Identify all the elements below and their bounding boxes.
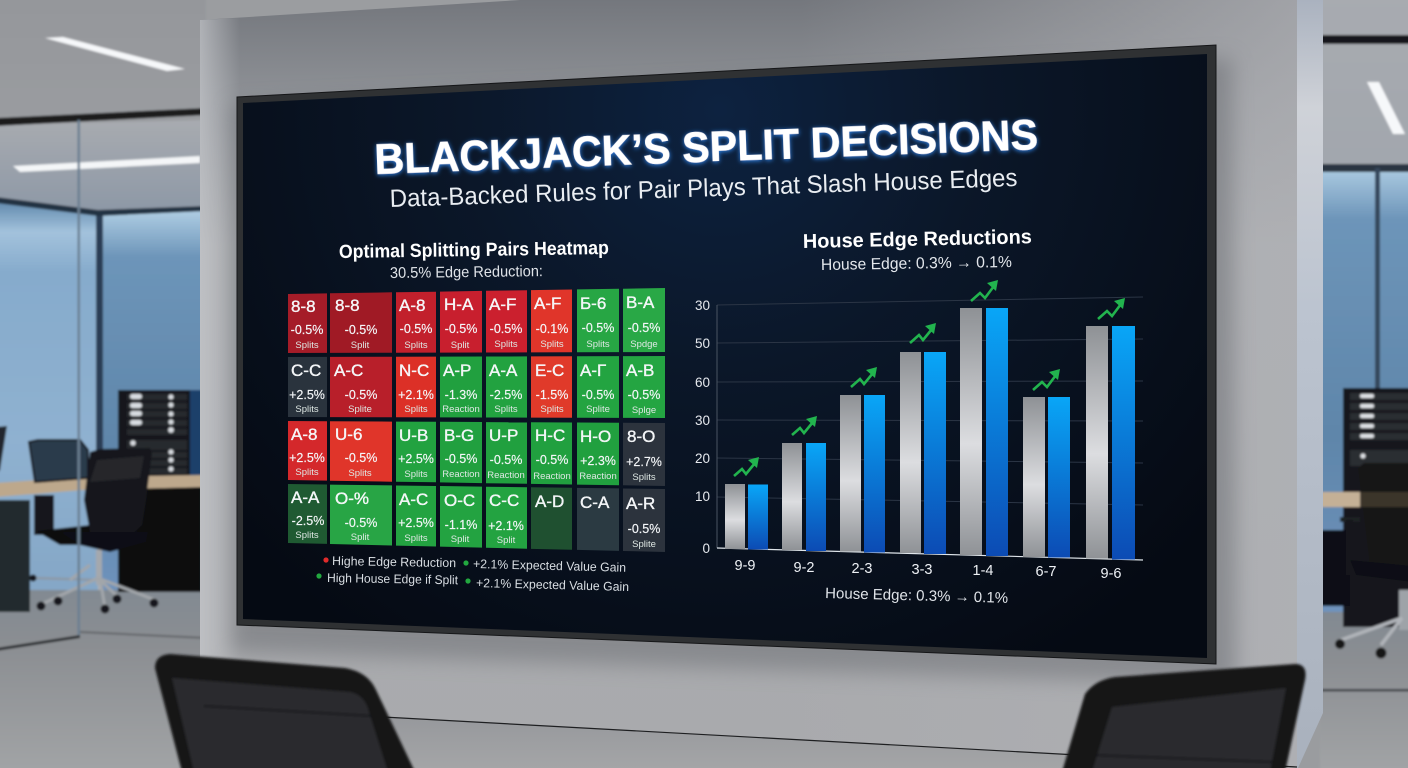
x axis labels: 9-9 xyxy=(735,558,755,574)
row 3 cell: U-P: U-P xyxy=(489,426,518,445)
row 4 cell: A-A: A-A xyxy=(291,488,320,507)
bar pair 1-4 xyxy=(960,308,1008,556)
icon: trend arrow 5 xyxy=(971,280,998,301)
row 3 cell: U-B: U-B xyxy=(399,426,428,445)
wall with screen mount xyxy=(200,0,1323,768)
row 3 cell: U-B xyxy=(396,422,436,482)
row 3 cell: U-6: U-6 xyxy=(335,425,362,444)
row 2 cell: N-C xyxy=(396,357,436,417)
row 1 cell: A-F xyxy=(486,290,527,352)
foreground chair left xyxy=(155,654,415,768)
row 2 cell: A-P xyxy=(440,356,482,418)
x axis labels: 3-3 xyxy=(912,562,932,578)
row 4 cell: A-A: Splits xyxy=(295,530,319,541)
row 1 cell: 8-8 wide: -0.5% xyxy=(345,323,377,337)
row 3 cell: U-P xyxy=(486,422,527,484)
x axis labels: 9-6 xyxy=(1101,566,1121,582)
row 4 cell: O-C xyxy=(440,486,482,548)
row 1 cell: B-6: -0.5% xyxy=(582,321,614,335)
icon: trend arrow 1 xyxy=(734,457,759,476)
y axis labels: 0 xyxy=(702,541,710,556)
row 4 cell: A-C: +2.5% xyxy=(398,516,434,530)
x axis labels: 9-2 xyxy=(794,560,814,576)
row 3 cell: 8-O xyxy=(623,423,665,486)
row 3 cell: B-G: Reaction xyxy=(442,469,480,480)
heatmap heading: Optimal Splitting Pairs Heatmap xyxy=(339,238,609,263)
y axis labels: 60 xyxy=(695,375,710,390)
row 2 cell: A-B: -0.5% xyxy=(628,388,660,402)
row 2 cell: C-C: Splits xyxy=(295,404,319,415)
row 4 cell: C-C xyxy=(486,487,527,549)
row 1 cell: B-A: -0.5% xyxy=(628,321,660,335)
row 3 cell: U-P: Reaction xyxy=(487,470,525,481)
row 4 cell: C-A xyxy=(577,488,619,551)
bar pair 9-2 xyxy=(782,443,826,551)
row 1 cell: B-6: Splits xyxy=(586,339,610,350)
y axis labels: 10 xyxy=(695,489,710,504)
row 2 cell: E-C xyxy=(531,356,572,418)
row 3 cell: A-8 xyxy=(288,421,327,481)
row 3 cell: B-G: B-G xyxy=(444,426,474,445)
row 1 cell: B-6: Б-6 xyxy=(580,294,606,313)
icon: trend arrow 2 xyxy=(792,416,817,435)
row 4 cell: C-C: Split xyxy=(497,535,516,546)
row 1 cell: A-F: -0.5% xyxy=(490,322,522,336)
row 4 cell: A-A: -2.5% xyxy=(292,514,324,528)
bar pair 9-6 xyxy=(1086,326,1135,560)
chart caption: House Edge: 0.3% → 0.1% xyxy=(825,585,1008,607)
row 4 cell: A-R: A-R xyxy=(626,494,655,513)
row 4 cell: A-R xyxy=(623,488,665,552)
row 3 cell: U-6: Splits xyxy=(348,468,372,479)
row 4 cell: A-R: -0.5% xyxy=(628,522,660,536)
row 1 cell: B-A: B-A xyxy=(626,293,655,312)
row 4 cell: C-C: +2.1% xyxy=(488,519,524,533)
row 1 cell: A-F: Splits xyxy=(540,339,564,350)
row 1 cell: A-8: A-8 xyxy=(399,296,425,315)
icon: trend arrow 4 xyxy=(910,323,936,343)
row 1 cell: A-F: -0.1% xyxy=(536,322,568,336)
row 2 cell: C-C: +2.5% xyxy=(289,388,325,402)
foreground chair right xyxy=(1062,664,1306,768)
row 1 cell: 8-8 wide: Split xyxy=(351,340,370,351)
row 4 cell: O-C: Split xyxy=(451,534,470,545)
panel: house edge reductions bar chart xyxy=(695,226,1143,607)
x axis labels: 1-4 xyxy=(973,563,993,579)
row 1 cell: A-F: A-F xyxy=(489,295,516,314)
row 2 cell: A-C xyxy=(330,357,392,417)
row 2 cell: A-Г: A-Г xyxy=(580,361,606,380)
row 4 cell: C-C: C-C xyxy=(489,491,519,510)
background: right office room xyxy=(1320,0,1408,768)
row 4 cell: A-A xyxy=(288,484,327,544)
row 2 cell: A-A: -2.5% xyxy=(490,388,522,402)
row 1 cell: 8-8 wide xyxy=(330,292,392,353)
row 1 cell: B-A: Spdge xyxy=(630,339,658,350)
row 3 cell: H-O: Reaction xyxy=(579,471,617,482)
row 1 cell: 8-8: Splits xyxy=(295,340,319,351)
background: left office room xyxy=(0,0,206,768)
screen surface xyxy=(243,54,1207,658)
y axis labels: 30 xyxy=(695,413,710,428)
y axis labels xyxy=(695,298,710,556)
x axis labels: 2-3 xyxy=(852,561,872,577)
row 3 cell: U-B: Splits xyxy=(404,469,428,480)
row 3 cell: 8-O: Splits xyxy=(632,472,656,483)
row 2 cell: A-P: A-P xyxy=(443,361,471,380)
row 4 cell: O-%: -0.5% xyxy=(345,516,377,530)
row 4 cell: A-D xyxy=(531,487,572,550)
row 2 cell: A-C: -0.5% xyxy=(345,388,377,402)
row 3 cell: U-6: -0.5% xyxy=(345,451,377,465)
row 3 cell: H-C xyxy=(531,422,572,484)
row 1 cell: A-F: A-F xyxy=(534,294,561,313)
row 2 cell: A-P: -1.3% xyxy=(445,388,477,402)
row 3 cell: U-P: -0.5% xyxy=(490,453,522,467)
row 4 cell: C-A: C-A xyxy=(580,493,610,512)
row 3 cell: 8-O: 8-O xyxy=(627,427,655,446)
row 2 cell: C-C: C-C xyxy=(291,361,321,380)
row 1 cell: B-A xyxy=(623,288,665,352)
row 2 cell: A-B: Splge xyxy=(632,405,656,416)
row 4 cell: A-C: Splits xyxy=(404,533,428,544)
row 4 cell: A-R: Splite xyxy=(632,539,656,550)
bar pair 2-3 xyxy=(840,395,885,552)
row 3 cell: H-O xyxy=(577,422,619,485)
row 4 cell: A-C: A-C xyxy=(399,490,428,509)
row 4 cell: O-C: -1.1% xyxy=(445,518,477,532)
row 1 cell: H-A: H-A xyxy=(444,295,474,314)
row 1 cell: 8-8 wide: 8-8 xyxy=(335,296,360,315)
row 4 cell: O-% xyxy=(330,485,392,546)
row 3 cell: A-8: Splits xyxy=(295,467,319,478)
bar pair 3-3 xyxy=(900,352,946,554)
x axis labels: 6-7 xyxy=(1036,564,1056,580)
row 2 cell: N-C: N-C xyxy=(399,361,429,380)
background: ceiling above wall xyxy=(190,0,1310,30)
chart heading: House Edge Reductions xyxy=(803,226,1032,253)
row 1 cell: A-F: Splits xyxy=(494,339,518,350)
y axis labels: 20 xyxy=(695,451,710,466)
row 3 cell: H-C: Reaction xyxy=(533,471,571,482)
bar pair 6-7 xyxy=(1023,397,1070,558)
row 1 cell: B-6 xyxy=(577,289,619,352)
row 2 cell: A-A xyxy=(486,356,527,418)
row 3 cell: H-O: +2.3% xyxy=(580,454,616,468)
row 1 cell: H-A: -0.5% xyxy=(445,322,477,336)
row 2 cell: N-C: +2.1% xyxy=(398,388,434,402)
row 2 cell: A-P: Reaction xyxy=(442,404,480,415)
title: BLACKJACK’S SPLIT DECISIONS xyxy=(374,111,1039,184)
row 3 cell: U-B: +2.5% xyxy=(398,452,434,466)
row 1 cell: 8-8: -0.5% xyxy=(291,323,323,337)
row 1 cell: 8-8 xyxy=(288,293,327,353)
row 2 cell: A-B: A-B xyxy=(626,361,654,380)
row 2 cell: A-A: Splits xyxy=(494,404,518,415)
row 2 cell: A-C: Splite xyxy=(348,404,372,415)
row 3 cell: H-C: -0.5% xyxy=(536,453,568,467)
chart subheading: House Edge: 0.3% → 0.1% xyxy=(821,254,1012,274)
bar pair 9-9 xyxy=(725,484,768,550)
row 3 cell: B-G xyxy=(440,422,482,483)
row 3 cell: A-8: +2.5% xyxy=(289,451,325,465)
row 2 cell: E-C: E-C xyxy=(535,361,564,380)
heatmap legend xyxy=(316,554,629,594)
row 1 cell: A-8: -0.5% xyxy=(400,322,432,336)
row 3 cell: H-C: H-C xyxy=(535,426,565,445)
row 2 cell: A-A: A-A xyxy=(489,361,518,380)
row 3 cell: A-8: A-8 xyxy=(291,425,317,444)
heatmap legend: Highe Edge Reduction xyxy=(332,554,456,570)
row 3 cell: 8-O: +2.7% xyxy=(626,455,662,469)
row 3 cell: B-G: -0.5% xyxy=(445,452,477,466)
screen bezel xyxy=(237,45,1216,664)
heatmap legend: +2.1% Expected Value Gain xyxy=(473,557,626,575)
row 2 cell: A-Г: Splite xyxy=(586,404,610,415)
row 4 cell: A-C xyxy=(396,486,436,546)
row 2 cell: E-C: Splits xyxy=(540,404,564,415)
row 1 cell: A-F xyxy=(531,290,572,352)
icon: trend arrow 7 xyxy=(1098,298,1125,319)
y axis labels: 50 xyxy=(695,336,710,351)
icon: trend arrow 3 xyxy=(851,367,877,387)
row 2 cell: A-Г xyxy=(577,356,619,418)
row 4 cell: A-D: A-D xyxy=(535,492,564,511)
row 1 cell: A-8 xyxy=(396,292,436,353)
row 2 cell: A-C: A-C xyxy=(334,361,363,380)
heatmap subheading: 30.5% Edge Reduction: xyxy=(390,263,543,282)
row 2 cell: A-Г: -0.5% xyxy=(582,388,614,402)
row 3 cell: U-6 xyxy=(330,421,392,482)
row 1 cell: 8-8: 8-8 xyxy=(291,297,316,316)
row 2 cell: C-C xyxy=(288,357,327,417)
row 2 cell: A-B xyxy=(623,356,665,418)
y axis labels: 30 xyxy=(695,298,710,313)
panel: optimal splitting pairs heatmap xyxy=(288,238,665,594)
heatmap legend: +2.1% Expected Value Gain xyxy=(476,576,629,594)
row 4 cell: O-C: O-C xyxy=(444,491,475,510)
subtitle: Data-Backed Rules for Pair Plays That Slash House Edges xyxy=(389,164,1018,213)
row 1 cell: H-A xyxy=(440,291,482,353)
row 4 cell: O-%: O-% xyxy=(335,489,369,508)
heatmap legend: High House Edge if Split xyxy=(327,571,459,587)
row 1 cell: A-8: Splits xyxy=(404,340,428,351)
icon: trend arrow 6 xyxy=(1033,369,1060,390)
row 2 cell: E-C: -1.5% xyxy=(536,388,568,402)
x axis labels xyxy=(735,558,1121,582)
row 3 cell: H-O: H-O xyxy=(580,427,611,446)
row 2 cell: N-C: Splits xyxy=(404,404,428,415)
row 1 cell: H-A: Split xyxy=(451,340,470,351)
chart grid lines and axes xyxy=(717,297,1143,560)
row 4 cell: O-%: Split xyxy=(351,532,370,543)
